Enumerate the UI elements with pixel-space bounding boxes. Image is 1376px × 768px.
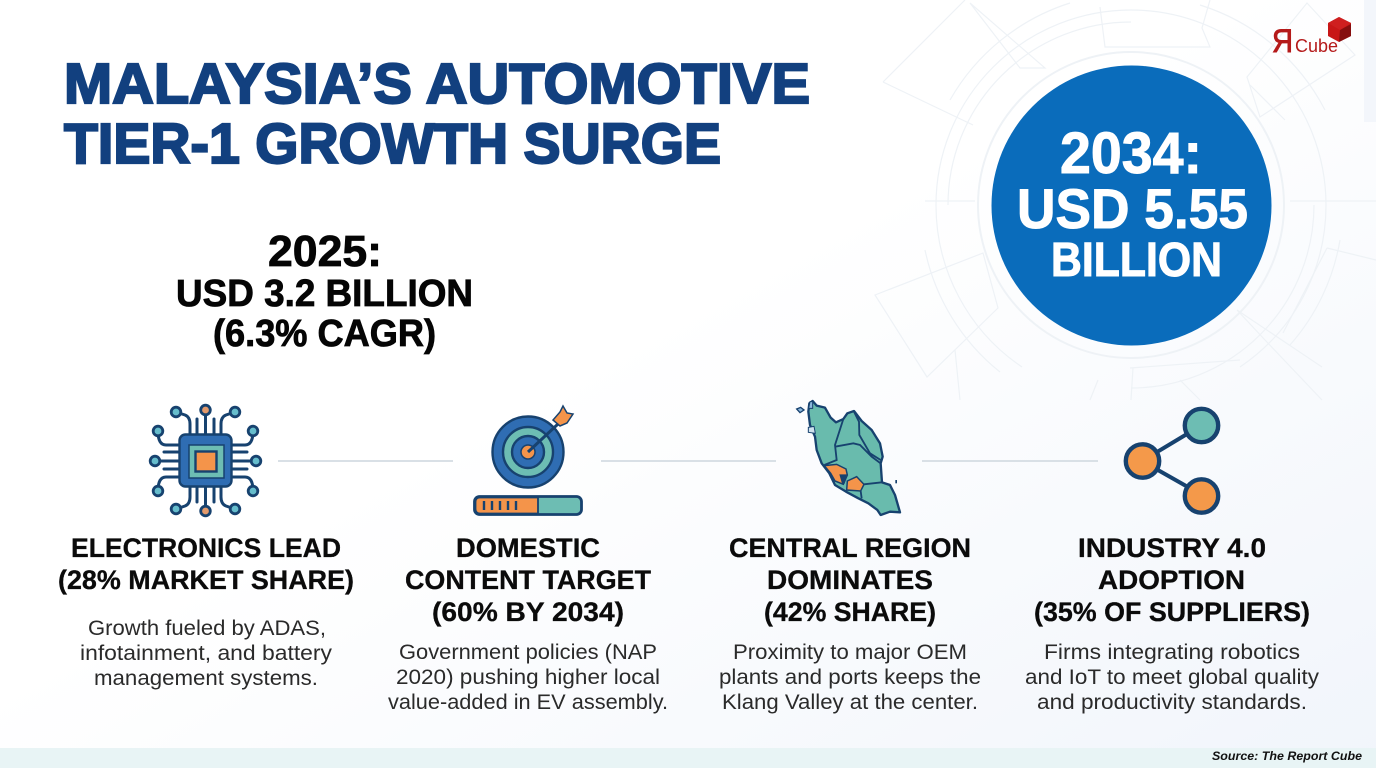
icon: microchip (150, 405, 261, 516)
description: Firms integrating robotics (1044, 641, 1300, 664)
heading: CONTENT TARGET (405, 565, 652, 595)
source note: Source: The Report Cube (1212, 749, 1362, 763)
2025 stat (176, 227, 473, 355)
title: TIER-1 GROWTH SURGE (64, 112, 721, 176)
column: domestic content target (388, 533, 668, 714)
description: Klang Valley at the center. (722, 691, 978, 714)
description: Proximity to major OEM (733, 641, 967, 664)
2034 callout circle: 2034: (1060, 121, 1202, 186)
logo: Cube (1295, 36, 1338, 56)
description: 2020) pushing higher local (396, 666, 660, 689)
heading: (35% OF SUPPLIERS) (1034, 597, 1310, 627)
heading: (60% BY 2034) (432, 597, 624, 627)
connector lines (278, 460, 1098, 462)
heading: (42% SHARE) (764, 597, 936, 627)
2034 callout circle (992, 66, 1272, 346)
heading: CENTRAL REGION (729, 533, 971, 563)
heading: INDUSTRY 4.0 (1078, 533, 1266, 563)
description: Government policies (NAP (399, 641, 657, 664)
description: plants and ports keeps the (719, 666, 981, 689)
description: infotainment, and battery (80, 642, 333, 665)
logo (1272, 17, 1351, 59)
description (719, 641, 981, 714)
description (1025, 641, 1320, 714)
heading (58, 533, 354, 595)
description (388, 641, 668, 714)
column: electronics lead (58, 533, 354, 690)
column: industry 4.0 adoption (1025, 533, 1320, 714)
description: value-added in EV assembly. (388, 691, 668, 714)
2025 stat: USD 3.2 BILLION (176, 273, 473, 315)
heading: (28% MARKET SHARE) (58, 565, 354, 595)
heading (405, 533, 652, 627)
heading (1034, 533, 1310, 627)
logo cube (1328, 17, 1351, 42)
icon: peninsular Malaysia map (797, 401, 900, 515)
title (64, 52, 810, 176)
description (80, 617, 333, 690)
heading (729, 533, 971, 627)
heading: ADOPTION (1098, 565, 1245, 595)
2034 callout circle: BILLION (1051, 234, 1222, 287)
heading: DOMINATES (767, 565, 933, 595)
icon: network share nodes (1126, 409, 1218, 513)
2034 callout circle: USD 5.55 (1017, 177, 1248, 240)
description: Growth fueled by ADAS, (88, 617, 326, 640)
logo text: Я (1272, 23, 1293, 59)
2025 stat: (6.3% CAGR) (213, 313, 436, 355)
icon: target with progress bar (474, 406, 582, 514)
column: central region dominates (719, 533, 981, 714)
footer band (0, 748, 1376, 768)
description: management systems. (94, 667, 318, 690)
2025 stat: 2025: (268, 227, 382, 276)
title: MALAYSIA’S AUTOMOTIVE (64, 52, 810, 116)
description: and IoT to meet global quality (1025, 666, 1320, 689)
heading: ELECTRONICS LEAD (71, 533, 341, 563)
description: and productivity standards. (1037, 691, 1307, 714)
heading: DOMESTIC (456, 533, 600, 563)
